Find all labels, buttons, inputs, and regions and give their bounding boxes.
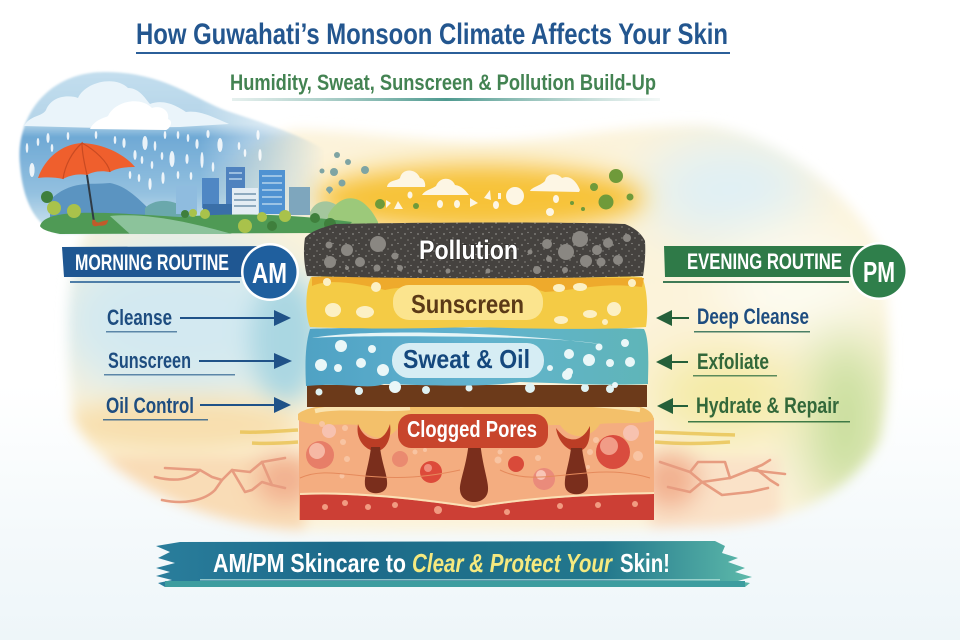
dry cracked skin: left <box>155 458 285 502</box>
step: Oil Control: Oil Control <box>106 393 194 418</box>
clouds <box>24 81 229 130</box>
banner text <box>213 548 670 578</box>
green hills <box>310 201 345 232</box>
panel: evening routine <box>656 242 908 422</box>
step: Oil Control <box>103 393 291 420</box>
mountains <box>50 183 150 225</box>
pollution particles and sun haze above the layers <box>320 152 634 216</box>
morning heading banner: MORNING ROUTINE <box>75 250 229 275</box>
subtitle: Humidity, Sweat, Sunscreen & Pollution Build-Up <box>230 70 656 95</box>
step: Cleanse: Cleanse <box>107 305 172 330</box>
AM badge <box>241 243 299 301</box>
step: Deep Cleanse: Deep Cleanse <box>697 304 809 329</box>
morning heading banner <box>62 246 286 283</box>
PM badge <box>850 242 908 300</box>
dry cracked skin: right <box>660 460 785 495</box>
step: Exfoliate: Exfoliate <box>697 349 769 374</box>
evening heading banner <box>663 246 866 283</box>
layer: brown oil band <box>307 383 647 407</box>
step: Exfoliate <box>656 349 777 376</box>
banner text: Skin! <box>620 548 670 578</box>
clogged pores <box>357 424 590 502</box>
city buildings <box>176 167 310 216</box>
title: How Guwahati’s Monsoon Climate Affects Your Skin <box>136 18 728 51</box>
panel: morning routine <box>62 243 299 420</box>
PM badge: PM <box>863 257 895 289</box>
step: Sunscreen: Sunscreen <box>108 348 191 373</box>
layer: sweat and oil <box>305 328 648 393</box>
layer: clogged pores skin <box>298 401 654 520</box>
label: Clogged Pores: Clogged Pores <box>407 416 537 442</box>
step: Deep Cleanse <box>656 304 810 332</box>
watercolor wash background <box>64 122 895 537</box>
label: Clogged Pores <box>398 414 548 448</box>
subtitle <box>230 70 660 101</box>
label: Sunscreen: Sunscreen <box>411 289 524 319</box>
yellow pigment streaks beside the skin block <box>240 430 735 444</box>
banner text: Clear & Protect Your <box>412 548 613 578</box>
layer: pollution <box>304 222 645 278</box>
evening heading banner: EVENING ROUTINE <box>687 249 842 274</box>
label highlight <box>393 285 543 320</box>
label: Pollution: Pollution <box>419 235 518 265</box>
banner text: AM/PM Skincare to <box>213 548 406 578</box>
step: Hydrate & Repair <box>657 393 850 422</box>
label highlight <box>392 343 544 378</box>
step: Sunscreen <box>104 348 292 376</box>
AM badge: AM <box>252 258 287 290</box>
illustration: monsoon rain scene <box>19 72 378 234</box>
rain drops <box>26 130 262 190</box>
step: Cleanse <box>106 305 291 332</box>
label: Sweat & Oil: Sweat & Oil <box>403 344 530 374</box>
step: Hydrate & Repair: Hydrate & Repair <box>696 393 839 418</box>
layer: sunscreen <box>306 276 647 329</box>
icon: red umbrella <box>38 143 135 225</box>
skin layer stack <box>298 222 654 520</box>
call-to-action banner <box>156 541 752 587</box>
skin bubbles <box>306 424 639 490</box>
bushes <box>47 201 291 233</box>
